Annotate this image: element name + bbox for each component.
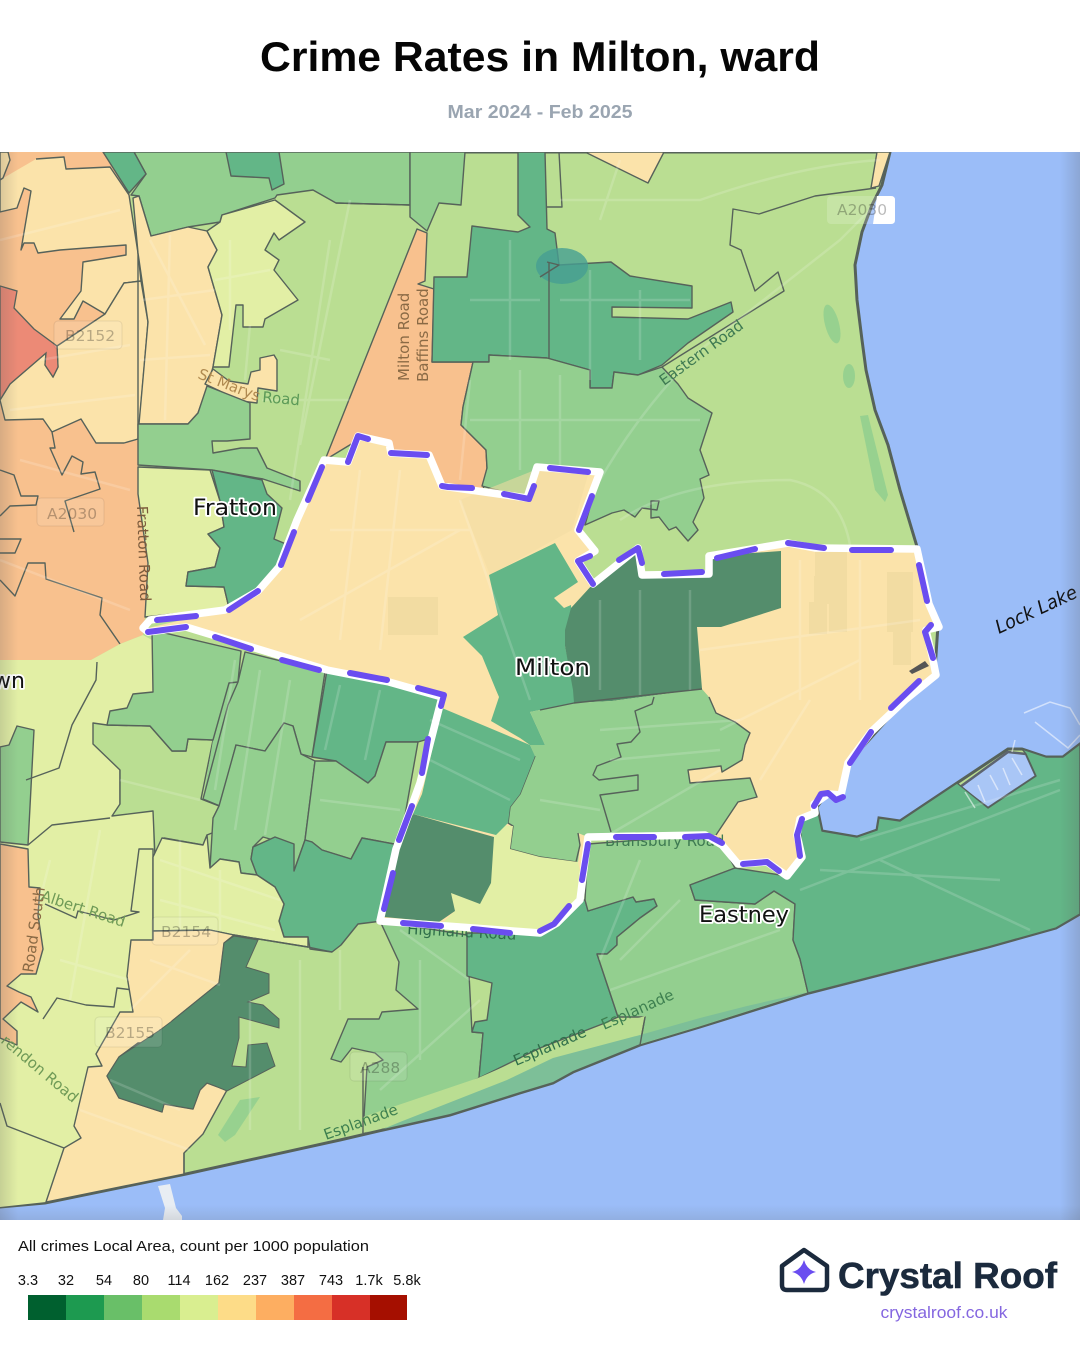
legend value labels: 743	[319, 1273, 343, 1289]
road labels: Esplanade	[321, 1100, 400, 1144]
road labels: St Marys	[196, 365, 263, 405]
road labels: Eastern Road	[656, 316, 747, 389]
legend value labels: 32	[58, 1273, 74, 1289]
boundary at coast	[363, 1017, 645, 1133]
region: green north of Fratton Road	[131, 152, 410, 236]
region: green north of dark block	[413, 708, 535, 835]
subtitle: date range: Mar 2024 - Feb 2025	[448, 102, 632, 122]
region: pale green E3	[153, 835, 308, 947]
region: coast yellow sliver	[871, 152, 890, 188]
region: top-left yellow	[0, 152, 141, 319]
coastal strip	[383, 992, 808, 1129]
region: dark block south	[384, 814, 494, 922]
park patches inside the ward	[388, 470, 913, 665]
region: dark bottom-left block	[107, 936, 279, 1112]
road labels: Albert Road	[39, 887, 128, 931]
road labels: Baffins Road	[414, 288, 432, 382]
region: south-west pale green	[0, 635, 155, 1207]
road labels: Road South	[19, 886, 49, 974]
legend value labels: 1.7k	[355, 1273, 383, 1289]
region: dark Milton block	[565, 548, 781, 703]
region: orange strip south	[0, 844, 43, 1045]
marina basin	[960, 752, 1036, 808]
region: red high-crime area	[0, 286, 58, 400]
title: Crime Rates in Milton, ward	[260, 33, 820, 80]
region: Eastney green	[690, 744, 1080, 993]
ward boundary: white line	[143, 436, 939, 933]
road badges: A2030	[47, 505, 97, 523]
boundary: central green parcels	[508, 689, 757, 862]
icon: house with star	[782, 1250, 827, 1290]
place label: Fratton: Fratton	[193, 496, 277, 521]
edge shadows	[0, 152, 18, 1220]
orange boundaries	[0, 252, 139, 644]
region: green block B2	[107, 630, 241, 751]
legend	[18, 1238, 421, 1320]
road labels: Fratton Road	[133, 506, 154, 602]
region: top yellow triangle	[585, 152, 664, 183]
region: Eastney light green	[585, 835, 808, 1045]
road labels: Highland Road	[407, 920, 517, 944]
choropleth map	[0, 152, 1080, 1220]
legend colour scale	[28, 1295, 407, 1320]
place label: Eastney: Eastney	[699, 903, 789, 928]
region: green block C2	[251, 837, 394, 952]
brand name: Crystal Roof	[838, 1255, 1058, 1296]
region: central green	[508, 689, 757, 862]
road labels: Esplanade	[598, 986, 677, 1034]
marina detail	[965, 702, 1080, 808]
legend value labels: 387	[281, 1273, 305, 1289]
region: green block B1	[203, 652, 325, 806]
boundary: north-east land parcels	[336, 152, 876, 367]
legend value labels: 80	[133, 1273, 149, 1289]
region: north green sliver	[410, 152, 465, 231]
region: Fratton pale green	[138, 467, 229, 617]
ward boundary: purple dashes	[148, 436, 933, 933]
pier	[158, 1184, 182, 1220]
region: north green block	[432, 152, 733, 388]
legend value labels: 3.3	[18, 1273, 38, 1289]
legend value labels	[18, 1273, 421, 1289]
region: west yellow	[0, 281, 148, 443]
road badges: A288	[360, 1059, 400, 1077]
region: green east of the ward	[461, 355, 712, 541]
place label: Milton: Milton	[515, 656, 590, 681]
region: Fratton green	[186, 470, 286, 608]
region: ward pale green	[439, 825, 582, 933]
region: yellow column east of Fratton Road	[133, 196, 222, 424]
road labels	[0, 288, 747, 1144]
boundary lines	[184, 935, 332, 1174]
region: western orange area	[0, 152, 148, 665]
pale road network	[0, 160, 1060, 1150]
small island	[909, 661, 929, 674]
road labels: Road	[262, 388, 301, 409]
legend value labels: 54	[96, 1273, 112, 1289]
region: pale green north	[207, 200, 305, 367]
boundaries: south-west	[0, 662, 153, 1148]
legend value labels: 5.8k	[393, 1273, 421, 1289]
legend title: All crimes Local Area, count per 1000 population	[18, 1238, 369, 1255]
region: green at St Marys Road	[138, 386, 300, 491]
legend value labels: 162	[205, 1273, 229, 1289]
pond	[536, 248, 588, 284]
land mass	[0, 152, 1080, 1207]
logo	[782, 1250, 1058, 1322]
road badges: B2155	[105, 1024, 155, 1042]
gap fill between green blocks	[204, 683, 237, 792]
coastal road band	[363, 1016, 645, 1133]
brand url: crystalroof.co.uk	[880, 1304, 1008, 1322]
region: green block B3	[210, 723, 315, 875]
region: Milton Road orange	[325, 229, 487, 496]
region: dark top-left green	[103, 152, 284, 193]
road badges: A2030	[837, 201, 887, 219]
road labels: Esplanade	[511, 1023, 589, 1070]
park lake and ponds	[218, 303, 888, 1142]
region: St Marys yellow	[205, 355, 277, 403]
region: green block C1	[312, 670, 442, 783]
road badges: B2154	[161, 923, 211, 941]
road labels: Milton Road	[395, 293, 413, 381]
road badges	[37, 196, 895, 1081]
region: south B park edge	[331, 921, 483, 1133]
region: west green strip	[0, 726, 34, 845]
region: Milton green	[463, 543, 578, 745]
region: bottom-left yellow	[46, 930, 234, 1202]
region: south-west green A	[93, 723, 219, 857]
legend value labels: 237	[243, 1273, 267, 1289]
road badges: B2152	[65, 327, 115, 345]
legend value labels: 114	[167, 1273, 191, 1289]
region: south C	[467, 897, 657, 1078]
region: green block B4	[305, 742, 418, 859]
ward base	[148, 436, 939, 933]
road labels: Bransbury Road	[605, 832, 724, 850]
